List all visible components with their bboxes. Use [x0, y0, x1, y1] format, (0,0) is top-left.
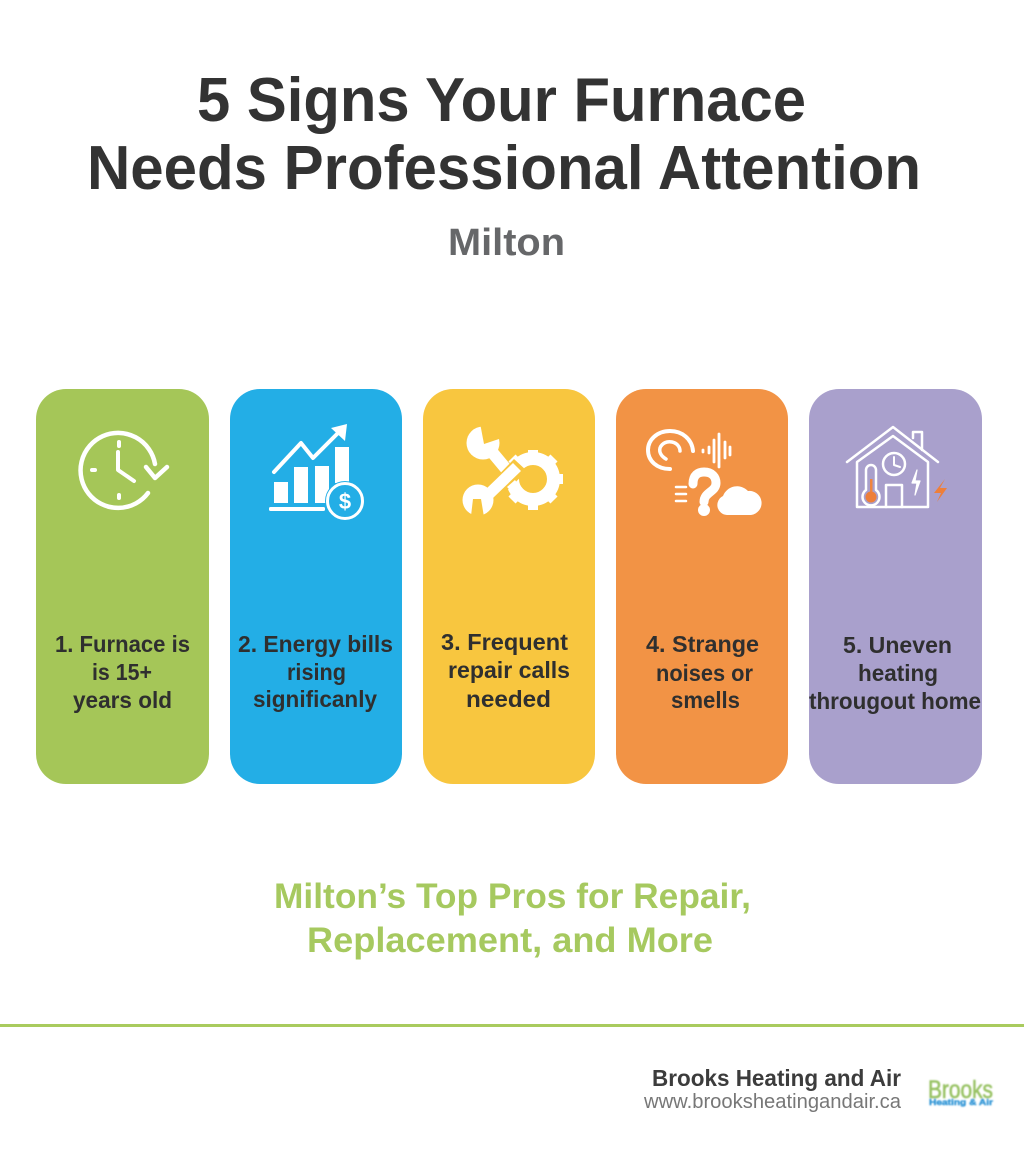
- company website: www.brooksheatingandair.ca: [643, 1091, 902, 1113]
- subtitle: Milton: [448, 222, 565, 264]
- footer divider: [0, 1024, 1024, 1027]
- icon: clock with arrow: [81, 433, 167, 508]
- label: sign 4: noises or: [656, 660, 753, 686]
- panel: sign 3: [423, 389, 595, 784]
- panel: sign 5: [809, 389, 982, 784]
- logo: Brooks: [928, 1076, 993, 1104]
- label: sign 1: is 15+: [92, 659, 152, 685]
- label: sign 4: 4. Strange: [646, 631, 759, 657]
- company name: Brooks Heating and Air: [652, 1065, 901, 1091]
- label: sign 2: significanly: [253, 686, 377, 712]
- logo: Heating & Air: [929, 1098, 993, 1107]
- panel: sign 4: [616, 389, 788, 784]
- label: sign 5: througout home: [809, 688, 981, 714]
- panel: sign 2: [230, 389, 402, 784]
- icon: house with thermometer: [847, 427, 947, 507]
- tagline: Milton’s Top Pros for Repair,: [274, 877, 751, 916]
- label: sign 3: 3. Frequent: [441, 629, 568, 655]
- label: sign 2: [238, 631, 393, 712]
- label: sign 1: years old: [73, 687, 172, 713]
- label: sign 4: smells: [671, 687, 740, 713]
- label: sign 5: heating: [858, 660, 938, 686]
- icon: rising bar chart with dollar coin: [269, 424, 365, 521]
- label: sign 5: [809, 632, 981, 714]
- label: sign 4: [646, 631, 759, 713]
- title: Needs Professional Attention: [87, 134, 921, 203]
- panel: sign 1: [36, 389, 209, 784]
- tagline: [274, 877, 751, 960]
- label: sign 5: 5. Uneven: [843, 632, 952, 658]
- label: sign 1: [55, 631, 190, 713]
- icon: rising bar chart with dollar coin: $: [339, 489, 351, 514]
- label: sign 3: [441, 629, 570, 712]
- label: sign 3: repair calls: [448, 657, 570, 683]
- label: sign 2: rising: [287, 659, 346, 685]
- label: sign 2: 2. Energy bills: [238, 631, 393, 657]
- title: [87, 66, 921, 203]
- title: 5 Signs Your Furnace: [197, 66, 806, 135]
- tagline: Replacement, and More: [307, 921, 713, 960]
- icon: wrench and gear: [462, 423, 563, 517]
- label: sign 3: needed: [466, 686, 551, 712]
- icon: noise, question mark and smell cloud: [648, 431, 762, 516]
- label: sign 1: 1. Furnace is: [55, 631, 190, 657]
